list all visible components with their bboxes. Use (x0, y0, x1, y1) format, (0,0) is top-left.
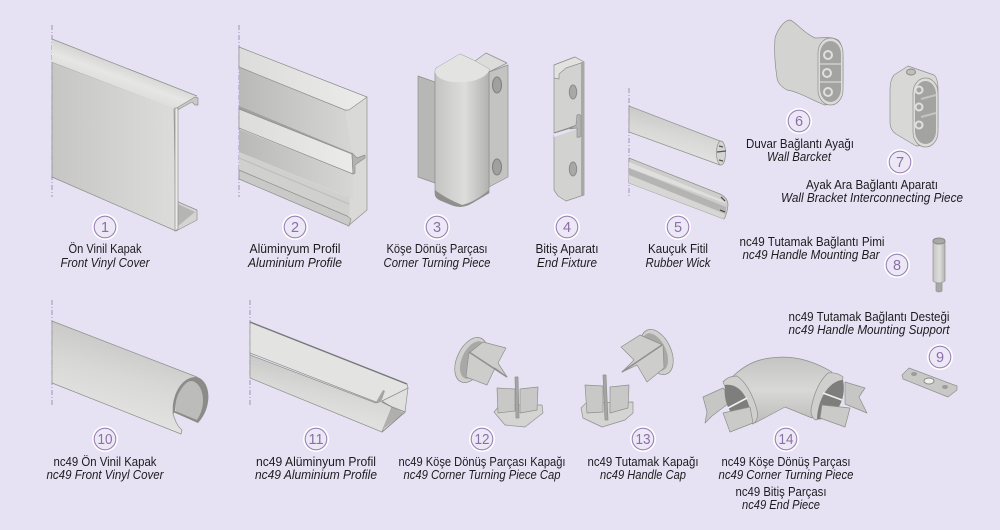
label 13: nc49 Tutamak Kapağı (588, 455, 698, 469)
label 11: nc49 Alüminyum Profil (256, 455, 376, 469)
panel: part 8 handle mounting bar (933, 238, 945, 292)
number badge 11: 11 (308, 432, 324, 448)
panel: part 12 corner turning piece cap (448, 332, 543, 427)
label 14: nc49 Corner Turning Piece (718, 468, 854, 482)
number badge 11 (303, 426, 329, 452)
label 3 (384, 242, 491, 270)
number badge 5: 5 (674, 220, 682, 236)
number badge 8 (884, 252, 910, 278)
label 4 (536, 242, 598, 270)
panel: part 2 aluminium profile (239, 25, 367, 226)
label 9 (788, 310, 950, 337)
label 7 (781, 178, 963, 205)
number badge 2 (282, 214, 308, 240)
panel: part 14 corner turning piece (703, 357, 867, 432)
number badge 4 (554, 214, 580, 240)
label 8: nc49 Handle Mounting Bar (742, 248, 880, 262)
label 2: Aluminium Profile (247, 256, 342, 270)
panel: part 6 wall bracket (775, 20, 843, 105)
panel: part 5 rubber wick (629, 88, 728, 219)
label 1 (60, 242, 150, 270)
label 4: End Fixture (537, 256, 597, 270)
number badge 14: 14 (778, 432, 794, 448)
number badge 7: 7 (896, 155, 904, 171)
label 5 (646, 242, 711, 270)
number badge 7 (887, 149, 913, 175)
panel: part 4 end fixture (554, 57, 584, 201)
label 3: Köşe Dönüş Parçası (386, 242, 488, 256)
label 11 (255, 455, 377, 482)
label 7: Wall Bracket Interconnecting Piece (781, 191, 963, 205)
number badge 12 (469, 426, 495, 452)
label 3: Corner Turning Piece (384, 256, 491, 270)
label 5: Kauçuk Fitil (648, 242, 708, 256)
label 1: Front Vinyl Cover (60, 256, 150, 270)
label 13 (588, 455, 698, 482)
label 6 (746, 137, 854, 164)
number badge 2: 2 (291, 220, 299, 236)
label 8: nc49 Tutamak Bağlantı Pimi (740, 235, 884, 249)
number badge 12: 12 (474, 432, 490, 448)
number badge 3 (424, 214, 450, 240)
number badge 9: 9 (936, 350, 944, 366)
label end piece: nc49 Bitiş Parçası (736, 485, 826, 499)
label 12: nc49 Köşe Dönüş Parçası Kapağı (398, 455, 566, 469)
label 1: Ön Vinil Kapak (68, 242, 142, 256)
label 10 (46, 455, 164, 482)
label end piece (736, 485, 826, 512)
label 5: Rubber Wick (646, 256, 711, 270)
number badge 1: 1 (101, 220, 109, 236)
label 12: nc49 Corner Turning Piece Cap (404, 468, 561, 482)
number badge 10: 10 (98, 432, 112, 448)
label 6: Duvar Bağlantı Ayağı (746, 137, 854, 151)
number badge 10 (92, 426, 118, 452)
number badge 8: 8 (893, 258, 901, 274)
number badge 1 (92, 214, 118, 240)
panel: part 3 corner turning piece (418, 53, 508, 207)
panel: part 11 nc49 aluminium profile (250, 300, 408, 432)
number badge 4: 4 (563, 220, 571, 236)
panel: part 10 nc49 front vinyl cover (52, 300, 208, 434)
number badge 6: 6 (795, 114, 803, 130)
number badge 6 (786, 108, 812, 134)
number badge 3: 3 (433, 220, 441, 236)
label 4: Bitiş Aparatı (536, 242, 598, 256)
number badge 13 (630, 426, 656, 452)
label 10: nc49 Front Vinyl Cover (46, 468, 164, 482)
label 2: Alüminyum Profil (250, 242, 340, 256)
label 2 (247, 242, 342, 270)
label 10: nc49 Ön Vinil Kapak (54, 455, 157, 469)
label end piece: nc49 End Piece (742, 498, 820, 512)
panel: part 13 handle cap (581, 324, 680, 427)
number badge 9 (927, 344, 953, 370)
panel: part 9 handle mounting support (902, 368, 957, 397)
label 9: nc49 Tutamak Bağlantı Desteği (788, 310, 950, 324)
label 9: nc49 Handle Mounting Support (788, 323, 950, 337)
panel: part 1 front vinyl cover (52, 25, 198, 231)
label 12 (398, 455, 566, 482)
number badge 14 (773, 426, 799, 452)
label 7: Ayak Ara Bağlantı Aparatı (806, 178, 938, 192)
label 6: Wall Barcket (767, 150, 831, 164)
label 11: nc49 Aluminium Profile (255, 468, 377, 482)
label 14: nc49 Köşe Dönüş Parçası (722, 455, 850, 469)
label 8 (740, 235, 884, 262)
panel: part 7 wall bracket interconnecting piece (890, 66, 938, 147)
number badge 5 (665, 214, 691, 240)
number badge 13: 13 (636, 432, 650, 448)
label 14 (718, 455, 854, 482)
label 13: nc49 Handle Cap (600, 468, 686, 482)
